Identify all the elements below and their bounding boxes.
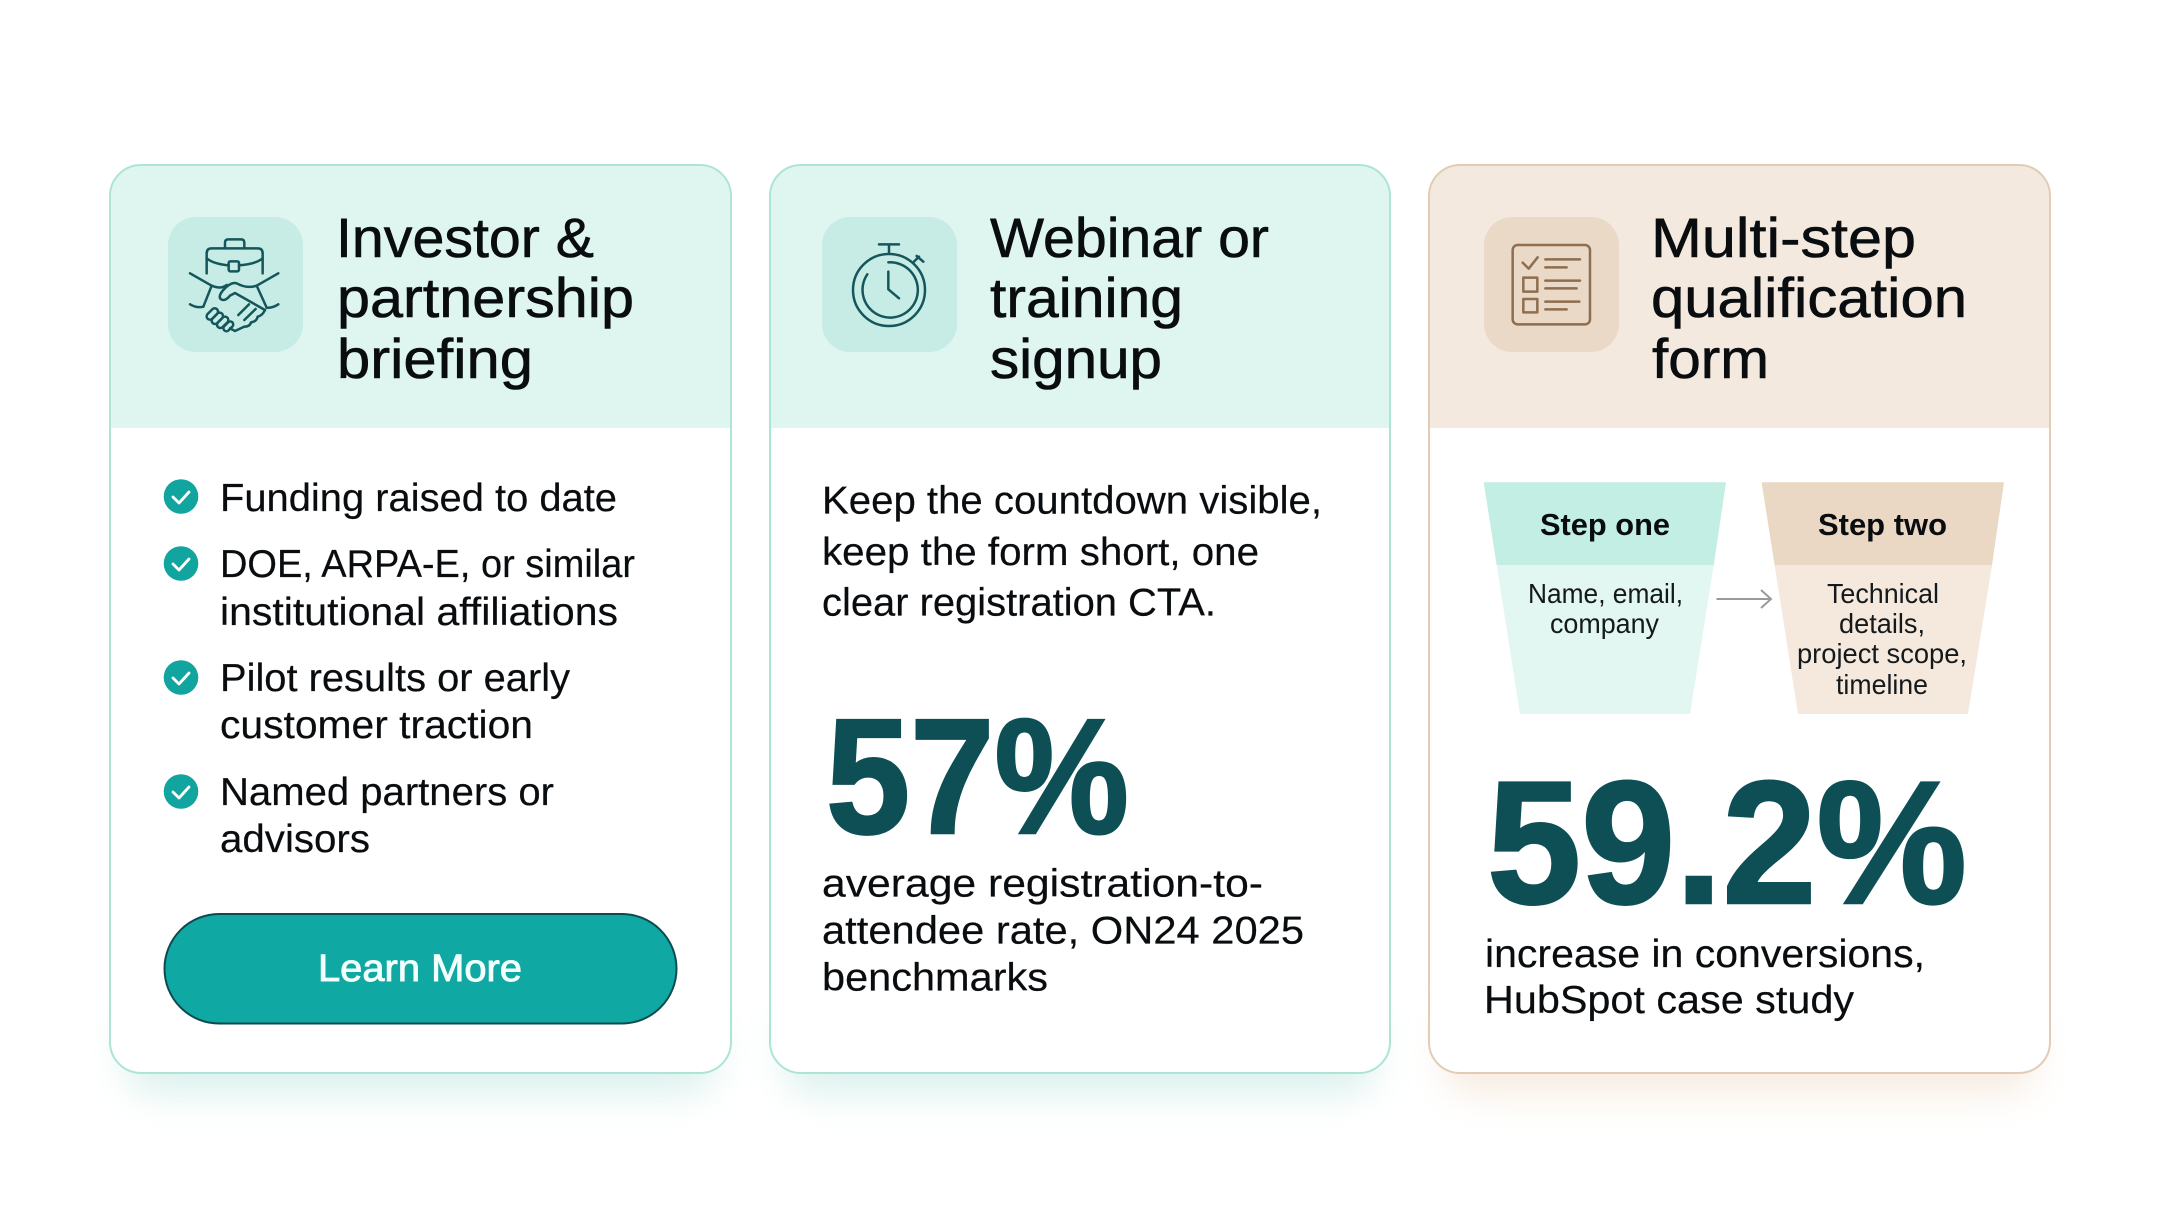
list item 4 [220, 771, 554, 861]
list item 2 [220, 543, 635, 634]
funnel step one: Name, email, [1528, 578, 1683, 609]
stat caption: hubspot case study: increase in conversions, [1485, 933, 1925, 976]
stat caption: registration to attendee: average registration-to- [822, 862, 1263, 906]
title: investor and partnership briefing [336, 206, 634, 390]
icon: stopwatch [822, 217, 957, 352]
title: investor and partnership briefing: Investor & [336, 206, 594, 269]
list item 3: customer traction [220, 704, 533, 747]
arrow: step one to step two [1716, 590, 1771, 608]
text: webinar guidance: keep the form short, one [822, 531, 1259, 574]
title: investor and partnership briefing: briefing [337, 327, 533, 390]
title: multi-step qualification form: form [1652, 327, 1769, 390]
funnel step two: timeline [1836, 669, 1928, 700]
text: webinar guidance [822, 480, 1322, 624]
funnel step two: Technical [1827, 578, 1939, 609]
list item 4: Named partners or [220, 771, 554, 814]
check icon 3 [164, 660, 198, 695]
title: multi-step qualification form [1651, 206, 1967, 390]
funnel step two: project scope, [1797, 638, 1967, 669]
title: investor and partnership briefing: partnership [337, 266, 634, 329]
title: multi-step qualification form: qualification [1651, 266, 1967, 329]
list item 3 [220, 657, 571, 747]
button: learn more [164, 914, 676, 1024]
checklist [164, 477, 635, 861]
infographic canvas [109, 164, 2051, 1108]
list item 2: institutional affiliations [220, 591, 618, 634]
funnel step one [1484, 482, 1726, 714]
stat caption: registration to attendee: attendee rate, ON24 2025 [822, 910, 1304, 952]
text: webinar guidance: Keep the countdown visible, [822, 480, 1322, 522]
funnel step one: company [1550, 608, 1659, 639]
title: webinar or training signup: training [990, 266, 1183, 329]
title: webinar or training signup: signup [990, 327, 1162, 390]
check icon 4 [164, 774, 198, 809]
funnel step two: Step two [1818, 507, 1947, 542]
stat: 59.2%: 59.2% [1487, 746, 1967, 941]
funnel step two: details, [1839, 608, 1925, 639]
text: webinar guidance: clear registration CTA. [822, 582, 1216, 624]
button: learn more: Learn More [318, 948, 522, 990]
list item 3: Pilot results or early [220, 657, 571, 700]
icon: checklist form [1484, 217, 1619, 352]
funnel step one: Step one [1540, 507, 1670, 542]
panel: webinar or training signup [770, 165, 1390, 1094]
stat: 57%: 57% [826, 685, 1129, 868]
panel: investor and partnership briefing [110, 165, 731, 1094]
stat caption: registration to attendee [822, 862, 1304, 1000]
stat caption: hubspot case study: HubSpot case study [1484, 979, 1855, 1022]
check icon 2 [164, 546, 198, 581]
title: webinar or training signup: Webinar or [990, 206, 1269, 269]
list item 2: DOE, ARPA-E, or similar [220, 543, 635, 586]
check icon 1 [164, 479, 198, 514]
stat caption: hubspot case study [1484, 933, 1925, 1022]
list item 1: Funding raised to date [220, 477, 617, 520]
title: multi-step qualification form: Multi-step [1651, 206, 1916, 269]
funnel step two [1762, 482, 2004, 714]
stat caption: registration to attendee: benchmarks [822, 956, 1048, 1000]
list item 4: advisors [220, 818, 370, 861]
title: webinar or training signup [990, 206, 1269, 390]
panel: multi-step qualification form [1429, 165, 2050, 1094]
icon: handshake and briefcase [168, 217, 303, 352]
